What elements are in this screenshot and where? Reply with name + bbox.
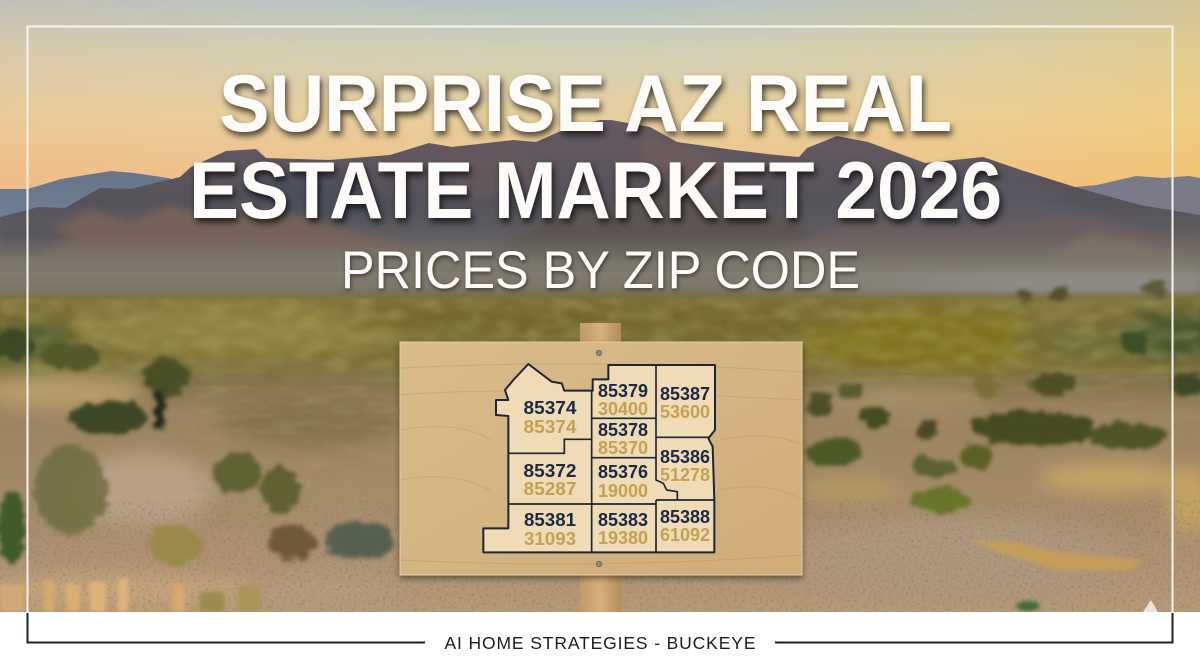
zip 85381: 85381 xyxy=(524,509,576,530)
haze on the valley floor xyxy=(0,235,1200,301)
zip 85383: 19380 xyxy=(598,527,648,548)
sandy ground patches xyxy=(0,374,145,410)
mottled sand xyxy=(190,385,400,525)
wood grain xyxy=(400,364,802,564)
map inner boundaries xyxy=(508,365,714,552)
zip 85383 xyxy=(598,509,648,548)
zip 85386 xyxy=(660,446,710,485)
title xyxy=(189,59,1002,236)
map outline xyxy=(483,364,715,552)
zip 85381: 31093 xyxy=(524,528,576,549)
title: ESTATE MARKET 2026 xyxy=(189,146,1002,236)
vegetation mottling xyxy=(0,298,1200,383)
zip code map xyxy=(483,364,715,552)
front ridges xyxy=(3,140,1174,254)
zip 85376: 19000 xyxy=(598,480,648,501)
dry grass xyxy=(0,540,1143,612)
main mountain range xyxy=(0,120,1200,272)
zip 85376: 85376 xyxy=(598,461,648,482)
zip 85388 xyxy=(660,506,710,545)
zip 85388: 61092 xyxy=(660,524,710,545)
zip 85381 xyxy=(524,509,576,549)
zip 85379 xyxy=(598,380,648,419)
zip 85387: 85387 xyxy=(660,383,710,404)
zip 85374: 85374 xyxy=(524,416,577,437)
wooden sign xyxy=(400,342,802,575)
small pale stone xyxy=(1143,600,1158,612)
zip 85387: 53600 xyxy=(660,401,710,422)
ground xyxy=(0,290,1200,615)
golden vegetation band xyxy=(0,306,1200,606)
zip 85372: 85372 xyxy=(524,460,576,481)
tree xyxy=(143,358,187,398)
desert scrub bushes xyxy=(0,280,1200,565)
distant mountains xyxy=(0,171,1200,270)
soil grit xyxy=(0,500,1200,612)
zip 85378 xyxy=(598,419,648,458)
zip 85374: 85374 xyxy=(524,397,577,418)
zip 85386: 85386 xyxy=(660,446,710,467)
zip 85383: 85383 xyxy=(598,509,648,530)
zip code labels xyxy=(524,380,710,549)
zip 85374 xyxy=(524,397,577,437)
zip 85387 xyxy=(660,383,710,422)
footer label: AI HOME STRATEGIES - BUCKEYE xyxy=(444,633,756,653)
zip 85372: 85287 xyxy=(524,478,576,499)
zip 85388: 85388 xyxy=(660,506,710,527)
sign screws xyxy=(596,350,602,567)
haze over the right valley xyxy=(0,270,1200,296)
subtitle: PRICES BY ZIP CODE xyxy=(341,241,860,300)
sign post xyxy=(580,323,621,613)
zip 85379: 30400 xyxy=(598,398,648,419)
footer bracket xyxy=(28,613,1172,642)
sky xyxy=(0,0,1200,215)
zip 85378: 85370 xyxy=(598,437,648,458)
zip 85379: 85379 xyxy=(598,380,648,401)
zip 85378: 85378 xyxy=(598,419,648,440)
sign board xyxy=(400,342,802,575)
zip 85376 xyxy=(598,461,648,501)
zip 85386: 51278 xyxy=(660,464,710,485)
title: SURPRISE AZ REAL xyxy=(219,59,952,149)
footer band xyxy=(0,612,1200,669)
zip 85372 xyxy=(524,460,576,499)
